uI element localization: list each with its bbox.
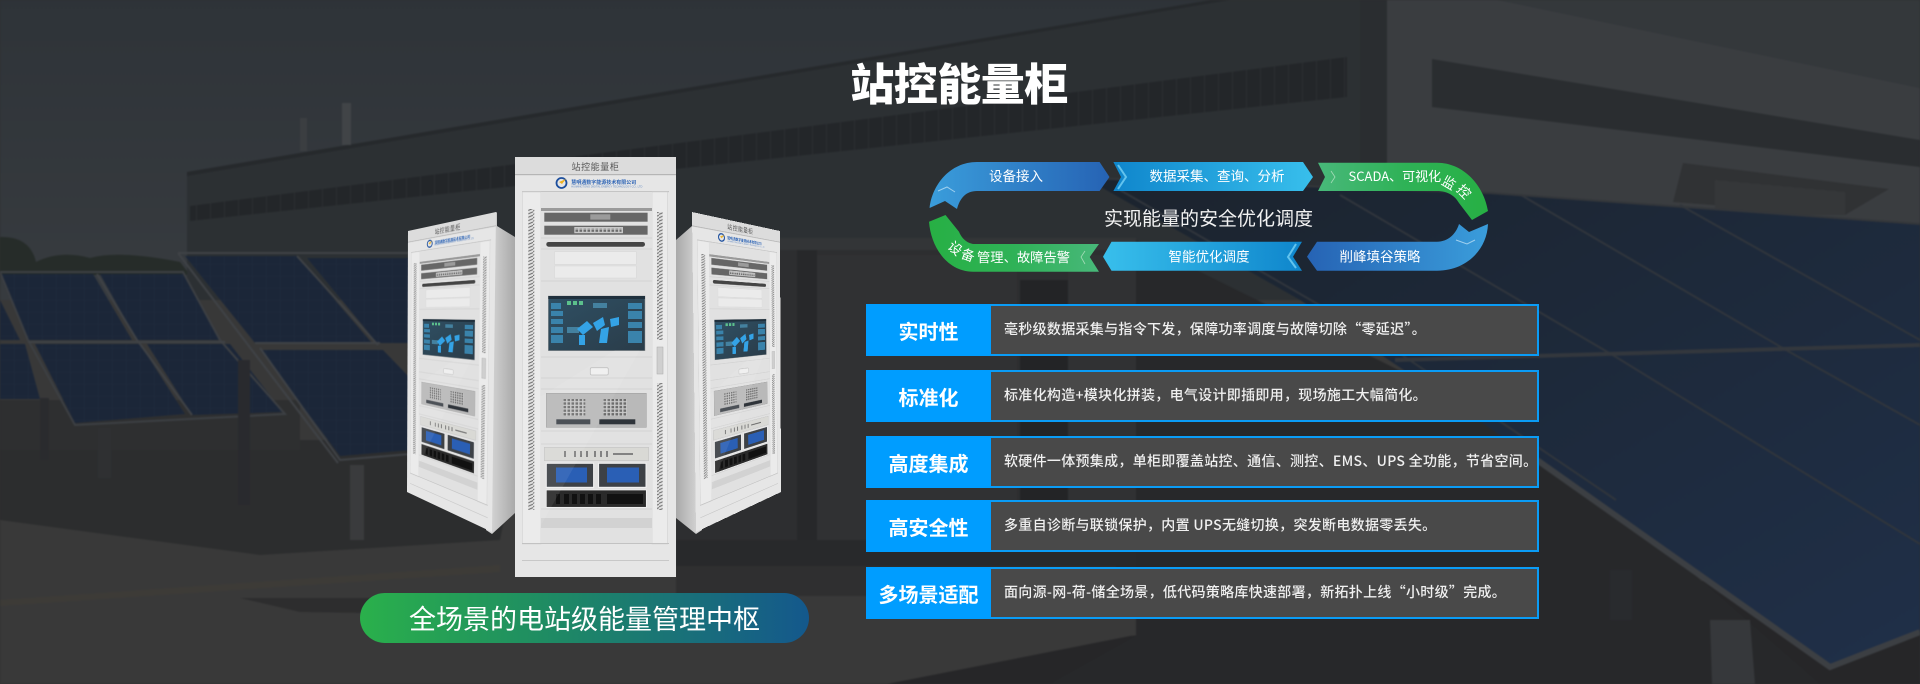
feature: high integration: 高度集成 xyxy=(888,448,968,477)
feature: multi scenario xyxy=(866,567,1539,619)
arrow: data collection: 数据采集、查询、分析 xyxy=(1150,165,1284,185)
arrow: device management: 管理、故障告警 xyxy=(977,247,1070,266)
arrow: peak shaving xyxy=(1307,224,1488,271)
arrow: device management: 设 xyxy=(944,235,967,259)
title: 站控能量柜 xyxy=(850,61,1068,110)
feature: real time: 毫秒级数据采集与指令下发，保障功率调度与故障切除“零延迟”。 xyxy=(1004,319,1426,339)
feature: real time xyxy=(866,304,1539,356)
feature: standardized xyxy=(866,370,1539,422)
right side cabinet xyxy=(692,212,781,532)
arrow: data collection xyxy=(1113,162,1313,191)
feature: high integration: 软硬件一体预集成，单柜即覆盖站控、通信、测控、EMS、UPS 全功能，节省空间。 xyxy=(1004,451,1537,471)
arrow: peak shaving: 削峰填谷策略 xyxy=(1340,246,1421,266)
feature: high safety: 高安全性 xyxy=(888,512,968,541)
left solar panels xyxy=(0,274,132,340)
feature: multi scenario: 面向源-网-荷-储全场景，低代码策略库快速部署，新拓扑上线“小时级”完成。 xyxy=(1004,582,1506,602)
arrow: device access: 设备接入 xyxy=(989,165,1043,185)
left side cabinet xyxy=(407,212,496,532)
slogan pill xyxy=(360,593,809,643)
slogan pill: 全场景的电站级能量管理中枢 xyxy=(409,598,760,637)
right ground dark xyxy=(887,560,1920,684)
big right panel xyxy=(1085,178,1920,667)
feature: high safety xyxy=(866,500,1539,552)
main cabinet: HUIMINGTONG DIGITAL ENERGY TECHNOLOGY CO., LTD xyxy=(571,184,642,188)
feature: real time: 实时性 xyxy=(898,316,958,345)
feature: standardized: 标准化构造+模块化拼装，电气设计即插即用，现场施工大幅简化。 xyxy=(1004,385,1427,405)
container boxes xyxy=(676,240,1136,566)
feature: high safety: 多重自诊断与联锁保护，内置 UPS无缝切换，突发断电数据零丢失。 xyxy=(1004,515,1436,535)
main cabinet: 站控能量柜 xyxy=(571,160,619,173)
main cabinet: 慧明通数字能源技术有限公司 xyxy=(571,179,636,186)
main cabinet xyxy=(515,157,676,577)
arrow: smart dispatch: 智能优化调度 xyxy=(1168,246,1250,266)
arrow: SCADA visual monitoring: 控 xyxy=(1453,179,1477,203)
arrow: smart dispatch xyxy=(1103,242,1302,271)
arrow: SCADA visual monitoring xyxy=(1318,163,1488,220)
feature: high integration xyxy=(866,436,1539,488)
arrow: SCADA visual monitoring: 监 xyxy=(1439,170,1460,194)
arrow: device management: 备 xyxy=(959,242,979,266)
loop center caption: 实现能量的安全优化调度 xyxy=(1104,204,1313,231)
arrow: SCADA visual monitoring: SCADA、可视化 xyxy=(1348,166,1441,185)
arrow: device management xyxy=(929,215,1099,272)
ground xyxy=(0,490,1920,684)
feature: multi scenario: 多场景适配 xyxy=(878,579,978,608)
arrow: device access xyxy=(930,162,1110,209)
feature: standardized: 标准化 xyxy=(898,382,958,411)
